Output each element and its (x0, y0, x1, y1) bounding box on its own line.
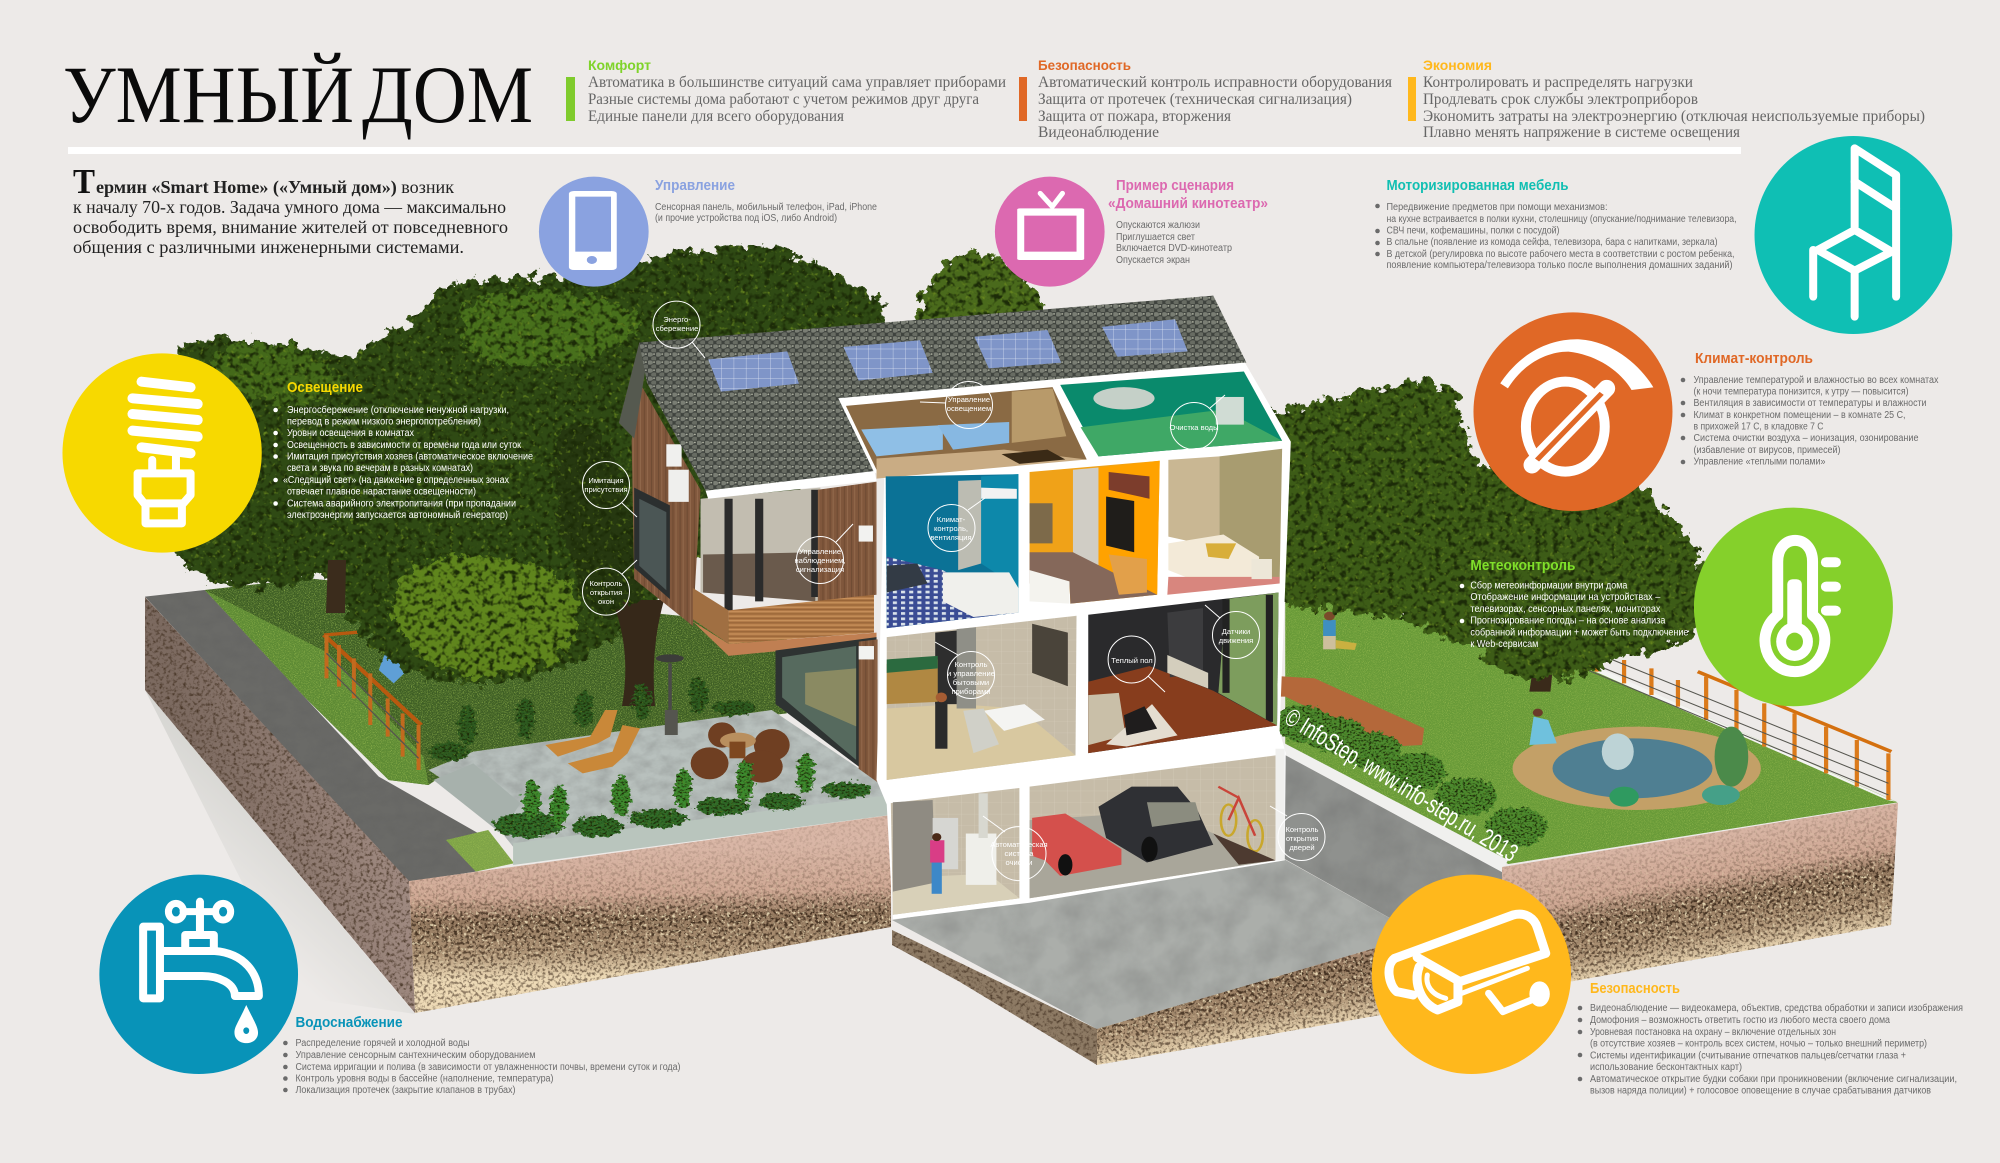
callout: presence imitation (582, 462, 637, 517)
callout: window control (582, 560, 637, 615)
icon: climate dial (1473, 312, 1672, 511)
callout: window control: окон (598, 597, 614, 606)
callout: automatic cleaning: Автоматическая (990, 840, 1048, 849)
title: ДОМ (362, 49, 533, 140)
pond (1513, 727, 1761, 810)
callout: automatic cleaning: система (1005, 849, 1034, 858)
panel: economy: Контролировать и распределять нагрузки (1423, 74, 1693, 91)
panel: security: Системы идентификации (считывание отпечатков пальцев/сетчатки глаза + (1590, 1049, 1906, 1061)
watermark: © InfoStep, www.info-step.ru, 2013 (1280, 703, 1523, 868)
panel: safety: Видеонаблюдение (1038, 124, 1159, 141)
icon: water tap (99, 875, 298, 1074)
callout: appliances (935, 642, 995, 698)
panel: safety: Защита от протечек (техническая сигнализация) (1038, 91, 1352, 108)
soil front left (409, 815, 891, 1013)
panel: water supply: Контроль уровня воды в бассейне (наполнение, температура) (296, 1073, 554, 1085)
icon: thermometer (1694, 508, 1893, 706)
callout: lighting control (920, 382, 992, 428)
panel: water supply: Локализация протечек (закрытие клапанов в трубах) (296, 1084, 516, 1096)
panel: motorized furniture: на кухне встраивается в полки кухни, столешницу (опускание/поднимание телевизора, (1386, 214, 1736, 225)
intro text: к началу 70-х годов. Задача умного дома — максимально (73, 197, 506, 217)
callout: climate (928, 498, 985, 552)
panel: climate control: (к ночи температура понизится, к утру — повысится) (1694, 386, 1908, 397)
panel: climate control: Климат в конкретном помещении – в комнате 25 С, (1694, 410, 1906, 421)
fence right (1571, 647, 1891, 800)
intro text: Т (73, 162, 95, 201)
panel: motorized furniture: В детской (регулировка по высоте рабочего места в соответствии с ростом ребенка, (1386, 248, 1734, 260)
hedge along retaining wall (1273, 705, 1547, 846)
concrete driveway and retaining wall (892, 742, 1508, 1029)
panel: safety: Автоматический контроль исправности оборудования (1038, 74, 1392, 91)
right tree (1240, 380, 1706, 679)
man with mower (1323, 612, 1357, 650)
icon: security camera (1372, 875, 1571, 1074)
panel: home cinema scenario: Опускаются жалюзи (1116, 220, 1200, 231)
woman in basement (932, 860, 942, 894)
panel: security: Домофония – возможность ответить гостю из любого места своего дома (1590, 1014, 1890, 1026)
panel: weather control: к Web-сервисам (1470, 639, 1539, 650)
callout: appliances: приборами (951, 687, 991, 696)
callout: lighting control: Управление (948, 395, 990, 404)
panel: climate control: Вентиляция в зависимости от температуры и влажности (1694, 398, 1926, 409)
house cutaway (619, 296, 1291, 919)
panel: safety (1019, 57, 1392, 141)
callout: energy saving: Энерго- (663, 315, 691, 324)
icon: chair (1755, 136, 1952, 334)
panel: water supply: Управление сенсорным сантехническим оборудованием (296, 1049, 536, 1061)
attic bathroom (1060, 372, 1282, 456)
panel: lighting: Освещенность в зависимости от времени года или суток (287, 440, 522, 451)
panel: safety: Защита от пожара, вторжения (1038, 108, 1231, 125)
callout: door control: Контроль (1286, 825, 1319, 834)
left lawn, path and terrace (145, 578, 890, 882)
front conifers (523, 753, 815, 827)
panel: motorized furniture: Передвижение предметов при помощи механизмов: (1386, 202, 1608, 213)
callout: climate: вентиляция (930, 533, 972, 542)
callout: surveillance: сигнализация (796, 565, 844, 574)
basement left: utility room (891, 788, 1019, 915)
panel: comfort: Комфорт (588, 57, 651, 73)
callout: window control: Контроль (590, 579, 623, 588)
panel: lighting: «Следящий свет» (на движение в определенных зонах (283, 475, 509, 486)
intro text: общения с различными инженерными системами. (73, 237, 464, 257)
soil front right (1097, 803, 1898, 1065)
callout: climate: Климат- (937, 515, 966, 524)
balcony room (701, 488, 820, 601)
panel: motorized furniture: В спальне (появление из комода сейфа, телевизора, бара с напитками, зеркала) (1386, 236, 1718, 248)
shadow under ground block (145, 690, 415, 1014)
panel: security: Видеонаблюдение — видеокамера, объектив, средства обработки и записи изображения (1590, 1002, 1963, 1014)
panel: control: Сенсорная панель, мобильный телефон, iPad, iPhone (655, 201, 877, 213)
callout: automatic cleaning (983, 816, 1048, 881)
panel: lighting: Энергосбережение (отключение ненужной нагрузки, (287, 404, 509, 416)
first floor right room: living room (1088, 592, 1279, 753)
panel: lighting: электроэнергии запускается автономный генератор) (287, 510, 508, 521)
slide (364, 603, 404, 627)
panel: lighting (62, 353, 533, 553)
panel: climate control: Управление «теплыми полами» (1694, 456, 1826, 468)
panel: motorized furniture: СВЧ печи, кофемашины, полки с посудой) (1386, 224, 1560, 236)
callout: water cleaning: Очистка воды (1169, 423, 1219, 432)
balcony rail (729, 595, 874, 644)
panel: lighting: света и звука по вечерам в разных комнатах) (287, 463, 473, 474)
panel: home cinema scenario: Пример сценария (1116, 177, 1234, 194)
roof gable edge (619, 342, 647, 438)
panel: lighting: перевод в режим низкого энергопотребления) (287, 415, 481, 427)
callout: water cleaning (1169, 395, 1225, 450)
icon: television (995, 177, 1105, 287)
panel: economy: Экономия (1423, 57, 1492, 73)
panel: weather control: телевизорах, сенсорных панелях, мониторах (1470, 604, 1660, 615)
panel: comfort: Единые панели для всего оборудования (588, 108, 844, 125)
callout: appliances: бытовыми (953, 678, 989, 687)
callout: door control: открытия (1286, 834, 1318, 843)
ground floor glazing (776, 637, 877, 780)
soil under driveway (892, 930, 1097, 1065)
panel: security: Автоматическое открытие будки собаки при проникновении (включение сигнализации, (1590, 1073, 1957, 1085)
planter wall (513, 795, 890, 865)
wood wall right (818, 482, 877, 601)
panel: weather control (1460, 508, 1893, 706)
steps (433, 763, 521, 833)
bicycle (1221, 805, 1263, 851)
second floor left room: blue (886, 474, 1018, 628)
panel: water supply: Водоснабжение (296, 1014, 402, 1031)
panel: comfort: Автоматика в большинстве ситуаций сама управляет приборами (588, 74, 1006, 91)
callout: presence imitation: присутствия (584, 485, 628, 494)
white frame (838, 363, 1291, 919)
right lawn, deck, fence, pond (1260, 590, 1898, 864)
panel: safety: Безопасность (1038, 57, 1131, 73)
basement right: garage (1030, 755, 1276, 898)
callout: window control: открытия (590, 588, 622, 597)
fence left (324, 630, 421, 770)
panel: economy (1408, 57, 1925, 141)
panel: control: (и прочие устройства под iOS, либо Android) (655, 212, 837, 224)
dark car (1098, 787, 1213, 863)
panel: security: использование бесконтактных карт) (1590, 1061, 1742, 1073)
callout: appliances: и управление (947, 669, 995, 678)
title (63, 49, 533, 140)
callout: surveillance (794, 524, 853, 584)
intro text (73, 162, 508, 257)
callout: door control: дверей (1289, 843, 1315, 852)
terrace furniture and plants (428, 654, 871, 838)
panel: lighting: Освещение (287, 379, 363, 396)
solar panels (708, 351, 799, 392)
pipe on garage corner (1276, 749, 1285, 860)
panel: climate control: Система очистки воздуха – ионизация, озонирование (1694, 433, 1919, 444)
panel: water supply (99, 875, 681, 1096)
panel: weather control: Метеоконтроль (1470, 557, 1575, 574)
panel: comfort (566, 57, 1006, 125)
right tree trunk (1529, 650, 1555, 692)
panel: motorized furniture: появление компьютера/телевизора только после выполнения домашних заданий) (1386, 260, 1732, 271)
person in kitchen (935, 702, 947, 749)
callout: automatic cleaning: очистки (1005, 858, 1033, 867)
back tree trunk (326, 560, 346, 613)
panel: home cinema scenario (995, 177, 1268, 287)
panel: security: Уровневая постановка на охрану – включение отдельных зон (1590, 1027, 1836, 1038)
red car (1032, 813, 1121, 876)
icon: smartphone (539, 177, 649, 287)
panel: climate control: в прихожей 17 С, в кладовке 7 С (1694, 421, 1824, 432)
callout: motion sensors (1205, 605, 1260, 658)
panel: lighting: Имитация присутствия хозяев (автоматическое включение (287, 452, 533, 462)
panel: weather control: Отображение информации на устройствах – (1470, 591, 1661, 603)
panel: home cinema scenario: «Домашний кинотеатр» (1108, 195, 1268, 212)
panel: home cinema scenario: Опускается экран (1116, 255, 1190, 266)
annotation callouts on house (582, 301, 1325, 881)
roof (639, 296, 1246, 491)
panel: lighting: отвечает плавное нарастание освещенности) (287, 487, 476, 498)
sun loungers (545, 710, 640, 773)
panel: comfort: Разные системы дома работают с учетом режимов друг друга (588, 91, 979, 108)
callout: appliances: Контроль (954, 660, 988, 669)
callout: motion sensors: Датчики (1222, 627, 1250, 636)
panel: motorized furniture (1375, 177, 1736, 271)
big tree left (160, 247, 900, 706)
callout: warm floor (1108, 636, 1165, 692)
attic left room (846, 387, 1087, 479)
wooden deck (1260, 675, 1424, 747)
panel: security (1372, 875, 1963, 1097)
main trunk (612, 600, 664, 706)
panel: climate control: Климат-контроль (1695, 350, 1813, 367)
second floor right room: bedroom (1167, 449, 1282, 595)
panel: water supply: Система ирригации и полива (в зависимости от увлажненности почвы, времени суток и года) (296, 1062, 680, 1073)
panel: economy: Экономить затраты на электроэнергию (отключая неиспользуемые приборы) (1423, 108, 1925, 125)
front shrubs (493, 782, 871, 838)
panel: weather control: Сбор метеоинформации внутри дома (1470, 580, 1628, 592)
panel: security: (в отсутствие хозяев – контроль всех систем, ночью – только внешний периметр) (1590, 1039, 1927, 1050)
callout: lighting control: освещением (947, 404, 991, 413)
panel: control (539, 177, 877, 287)
back conifers (428, 677, 757, 762)
callout: climate: контроль, (934, 524, 968, 533)
callout: surveillance: Управление (799, 547, 841, 556)
table and wicker chairs (708, 722, 736, 748)
panel: home cinema scenario: Включается DVD-кинотеатр (1116, 243, 1232, 254)
intro text: ермин «Smart Home» («Умный дом») возник (96, 177, 454, 198)
lit foliage (392, 555, 577, 680)
panel: weather control: Прогнозирование погоды – на основе анализа (1470, 616, 1666, 627)
callout: energy saving (653, 301, 705, 358)
soil left wall (145, 597, 415, 1013)
panel: economy: Продлевать срок службы электроприборов (1423, 91, 1698, 108)
panel: security: Безопасность (1590, 980, 1680, 997)
panel: home cinema scenario: Приглушается свет (1116, 232, 1195, 243)
panel: security: вызов наряда полиции) + голосовое оповещение в случае срабатывания датчиков (1590, 1085, 1931, 1097)
panel: economy: Плавно менять напряжение в системе освещения (1423, 124, 1740, 141)
woman by pond (1529, 717, 1557, 745)
back tree behind roof (920, 252, 1040, 330)
side window (634, 488, 670, 599)
callout: presence imitation: Имитация (588, 476, 624, 485)
title: УМНЫЙ (63, 49, 354, 140)
panel: lighting: Уровни освещения в комнатах (287, 428, 414, 439)
panel: lighting: Система аварийного электропитания (при пропадании (287, 499, 516, 510)
roof white trim (706, 471, 877, 499)
terrace paving (428, 710, 889, 847)
callout: warm floor: Теплый пол (1111, 656, 1153, 665)
callout: surveillance: наблюдением, (794, 556, 846, 565)
air conditioners (666, 444, 682, 467)
first floor left room: kitchen (887, 616, 1077, 780)
panel: climate control: Управление температурой и влажностью во всех комнатах (1694, 375, 1938, 386)
panel: control: Управление (655, 177, 735, 194)
side wall wood (632, 382, 701, 626)
panel: motorized furniture: Моторизированная мебель (1386, 177, 1568, 194)
icon: energy-saving bulb (62, 353, 262, 553)
second floor middle room: orange (1030, 461, 1160, 604)
panel: climate control (1473, 312, 1938, 511)
lamp (668, 663, 672, 717)
callout: motion sensors: движения (1219, 636, 1253, 645)
panel: water supply: Распределение горячей и холодной воды (296, 1038, 470, 1049)
callout: door control (1270, 806, 1325, 860)
cameras (859, 526, 873, 542)
intro text: освободить время, внимание жителей от повседневного (73, 217, 508, 237)
header divider (68, 147, 1741, 154)
panel: climate control: (избавление от вирусов, примесей) (1694, 444, 1840, 456)
callout: energy saving: сбережение (656, 324, 698, 333)
panel: weather control: собранной информации + может быть подключение (1470, 626, 1689, 638)
